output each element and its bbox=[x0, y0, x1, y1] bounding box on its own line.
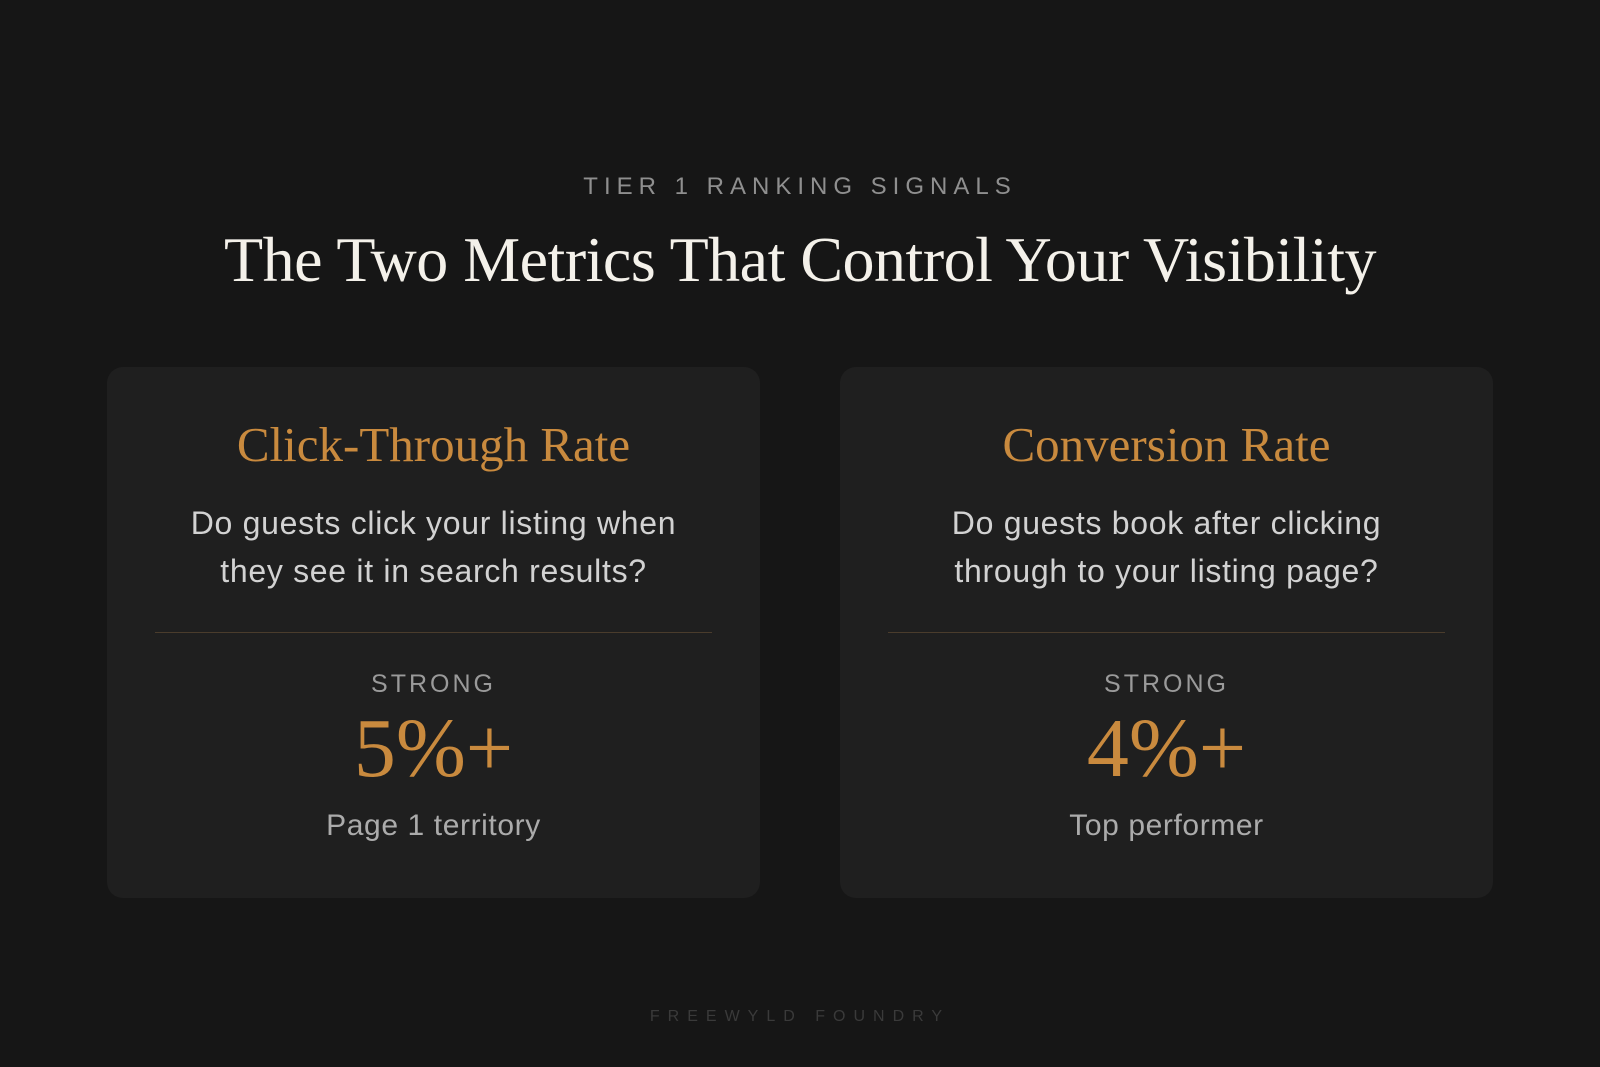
big number: 4%+ bbox=[1087, 702, 1246, 795]
sub text: Page 1 territory bbox=[326, 809, 541, 842]
card title: Click-Through Rate bbox=[237, 417, 630, 472]
sub text: Top performer bbox=[1069, 809, 1264, 842]
big number: 5%+ bbox=[354, 702, 513, 795]
description bbox=[191, 505, 676, 589]
description bbox=[952, 505, 1381, 589]
description: through to your listing page? bbox=[954, 553, 1379, 589]
description: Do guests click your listing when bbox=[191, 505, 676, 541]
panel: click-through rate bbox=[107, 367, 760, 898]
eyebrow: TIER 1 RANKING SIGNALS bbox=[583, 173, 1017, 200]
title: The Two Metrics That Control Your Visibility bbox=[224, 224, 1376, 295]
label: STRONG bbox=[1104, 670, 1229, 698]
description: they see it in search results? bbox=[220, 553, 647, 589]
description: Do guests book after clicking bbox=[952, 505, 1381, 541]
footer: FREEWYLD FOUNDRY bbox=[650, 1008, 950, 1025]
panel: conversion rate bbox=[840, 367, 1493, 898]
label: STRONG bbox=[371, 670, 496, 698]
card title: Conversion Rate bbox=[1002, 417, 1330, 472]
